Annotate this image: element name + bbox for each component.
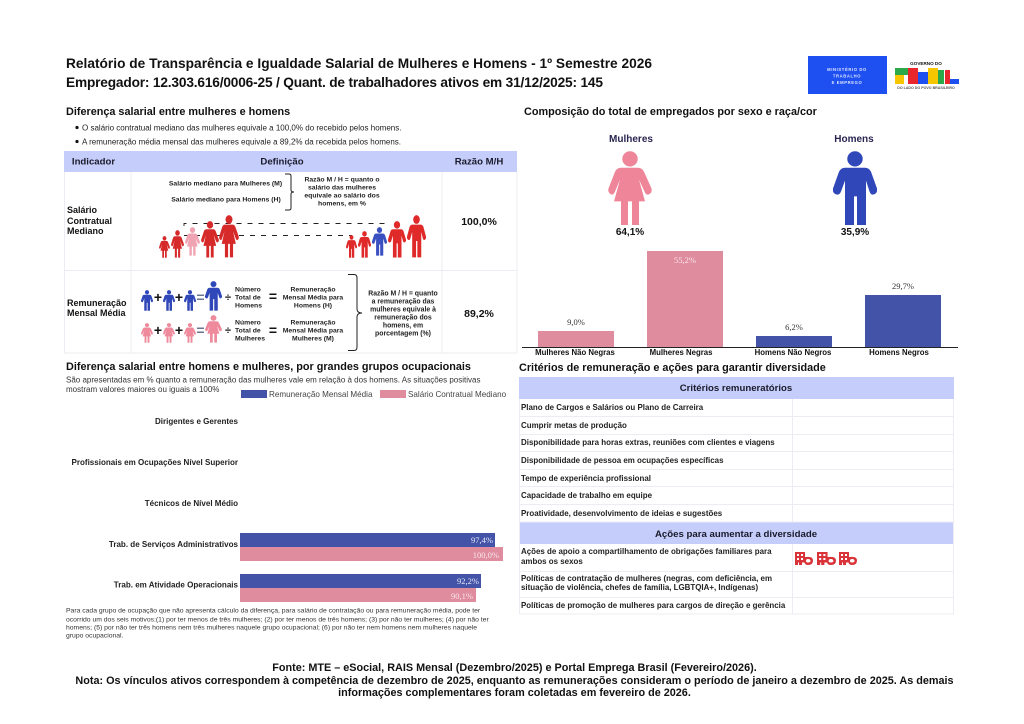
row label: Salário — [67, 205, 98, 215]
definition text: mulheres equivale à — [370, 306, 436, 314]
logo: Governo do Brasil — [895, 61, 959, 90]
title: Empregador: 12.303.616/0006-25 / Quant. de trabalhadores ativos em 31/12/2025: 145 — [66, 75, 603, 90]
definition text: Salário mediano para Homens (H) — [171, 196, 281, 204]
formula: homens — [141, 281, 343, 311]
icon group: homens — [833, 134, 877, 238]
definition text: remuneração dos — [374, 314, 432, 322]
icon group: homens: 35,9% — [841, 227, 869, 238]
dashed median lines — [184, 224, 387, 236]
formula: mulheres: = — [196, 322, 205, 338]
heading: critérios: Critérios de remuneração e ações para garantir diversidade — [519, 362, 826, 374]
rows: critérios: Tempo de experiência profissional — [521, 474, 651, 483]
formula: mulheres: Mensal Média para — [283, 328, 343, 334]
row: remuneração mensal média — [67, 274, 495, 350]
subtitle: São apresentadas em % quanto a remuneração das mulheres vale em relação à dos homens. As situações positivas — [66, 376, 480, 384]
row label: Remuneração — [67, 298, 127, 308]
bars: atividade operacional — [240, 574, 481, 602]
bar chart: composição: Homens Não Negros — [755, 348, 832, 357]
definition text: Salário mediano para Mulheres (M) — [169, 180, 282, 188]
formula: mulheres — [141, 315, 343, 343]
note: motivos: Para cada grupo de ocupação que não apresenta cálculo da diferença, para salário de contratação ou para remuneração média, pode ter — [66, 608, 481, 614]
category labels: Dirigentes e Gerentes — [155, 417, 239, 426]
formula: homens: Total de — [235, 294, 261, 302]
rows: critérios: Cumprir metas de produção — [521, 421, 627, 430]
definition text: Razão M / H = quanto o — [304, 176, 380, 184]
bar chart: composição: 29,7% — [892, 281, 914, 291]
rows: ações — [521, 547, 786, 610]
icon group: homens: Homens — [834, 134, 874, 145]
table: critérios — [519, 377, 954, 614]
bar chart: composição: Homens Negros — [869, 348, 930, 357]
icon group: mulheres — [608, 134, 653, 238]
logo: Ministério do Trabalho e Emprego — [808, 56, 887, 94]
bars: serviços administrativos: 97,4% — [471, 535, 493, 545]
heading: diferença por grupos: Diferença salarial entre homens e mulheres, por grandes grupos ocupacionais — [66, 361, 471, 373]
formula: homens: = — [196, 289, 205, 305]
bars: atividade operacional: 92,2% — [457, 576, 479, 586]
icons: empresas — [795, 552, 857, 565]
brace — [285, 174, 294, 210]
footer: fonte e nota: Fonte: MTE – eSocial, RAIS Mensal (Dezembro/2025) e Portal Emprega Brasil (Fevereiro/2026). — [272, 662, 757, 674]
legend: Salário Contratual Mediano — [408, 390, 507, 399]
formula: mulheres: Remuneração — [291, 320, 335, 326]
bullets: resumo — [75, 124, 401, 146]
definition text — [169, 176, 380, 208]
category labels — [72, 417, 239, 590]
bar chart: composição: 6,2% — [785, 322, 803, 332]
icon group: mulheres: 64,1% — [616, 227, 644, 238]
formula: homens: ÷ — [225, 292, 231, 304]
row: salário contratual mediano — [67, 174, 497, 258]
header: critérios remuneratórios: Critérios remuneratórios — [680, 383, 792, 394]
subtitle: mostram valores maiores ou iguais a 100% — [66, 385, 219, 394]
note: motivos: ocorrido um dos seis motivos:(1) por ter menos de três mulheres; (2) por ter menos de três homens; (3) por não ter mulheres; (4) por não ter — [66, 616, 489, 624]
formula: mulheres: + — [175, 322, 183, 338]
formula: mulheres: = — [269, 322, 277, 338]
footer: fonte e nota: Nota: Os vínculos ativos correspondem à competência de dezembro de 2025, enquanto as remunerações consideram o período de janeiro a dezembro de 2025. As demais — [75, 675, 954, 687]
icons: mulheres — [159, 215, 239, 258]
formula: mulheres: + — [154, 322, 162, 338]
bullets: resumo: O salário contratual mediano das mulheres equivale a 100,0% do recebido pelos homens. — [82, 124, 401, 132]
row label — [67, 205, 112, 236]
definition text: Razão M / H = quanto — [368, 290, 438, 298]
category labels: Técnicos de Nível Médio — [145, 499, 238, 508]
table header: Razão M/H — [455, 156, 503, 168]
logo: Ministério do Trabalho e Emprego: MINISTÉRIO DO — [827, 67, 867, 72]
definition text: homens, em % — [318, 200, 366, 208]
brace — [348, 274, 362, 350]
row label: Contratual — [67, 216, 112, 226]
bar chart: composição: 55,2% — [674, 255, 696, 265]
icons: homens — [346, 215, 426, 258]
table: indicadores — [64, 151, 517, 353]
rows: ações: Políticas de promoção de mulheres para cargos de direção e gerência — [521, 601, 786, 610]
note: motivos: homens; (5) por não ter três homens nem três mulheres naquele grupo ocupacional; (6) por não ter nem homens nem mulheres naquele — [66, 624, 477, 632]
category labels: Trab. de Serviços Administrativos — [109, 540, 239, 549]
definition text: porcentagem (%) — [375, 330, 431, 338]
value: 100,0% — [461, 216, 497, 228]
rows: critérios: Plano de Cargos e Salários ou Plano de Carreira — [521, 403, 704, 412]
rows: critérios: Disponibilidade de pessoa em ocupações específicas — [521, 456, 724, 465]
icon group: mulheres: Mulheres — [609, 134, 653, 145]
legend: Remuneração Mensal Média — [269, 390, 373, 399]
formula: homens: Remuneração — [291, 286, 335, 294]
bar chart: grupos ocupacionais — [72, 417, 503, 602]
category labels: Trab. em Atividade Operacionais — [114, 580, 239, 590]
rows: ações: Políticas de contratação de mulheres (negras, com deficiência, em — [521, 574, 772, 583]
formula: homens: Mensal Média para — [283, 294, 343, 302]
formula: homens: + — [175, 289, 183, 305]
rows: critérios: Disponibilidade para horas extras, reuniões com clientes e viagens — [521, 438, 775, 447]
formula: mulheres: Número — [235, 320, 261, 326]
definition text: salário das mulheres — [308, 184, 376, 192]
row label: Mensal Média — [67, 308, 127, 318]
rows: ações: Ações de apoio a compartilhamento de obrigações familiares para — [521, 547, 772, 556]
logo: Ministério do Trabalho e Emprego: TRABALHO — [833, 74, 861, 78]
formula: homens: + — [154, 289, 162, 305]
bullets: resumo: A remuneração média mensal das mulheres equivale a 89,2% da recebida pelos homens. — [82, 138, 401, 146]
logo: Governo do Brasil: DO LADO DO POVO BRASILEIRO — [897, 86, 955, 90]
bars: atividade operacional: 90,1% — [451, 591, 473, 601]
rows: ações: situação de violência, chefes de família, LGBTQIA+, Indígenas) — [521, 583, 758, 592]
formula: mulheres: Mulheres — [235, 336, 265, 342]
row label — [67, 298, 127, 318]
bar chart: composição: 9,0% — [567, 317, 585, 327]
footer: fonte e nota — [75, 662, 954, 699]
legend — [241, 390, 507, 399]
title — [66, 56, 652, 90]
rows: critérios — [521, 403, 775, 518]
bar chart: composição: Mulheres Negras — [650, 348, 713, 357]
bars: serviços administrativos: 100,0% — [473, 550, 499, 560]
table header: Definição — [260, 156, 304, 168]
formula: homens: = — [269, 288, 277, 304]
formula: mulheres: Mulheres (M) — [292, 336, 334, 342]
definition text — [368, 290, 438, 338]
logo: Ministério do Trabalho e Emprego: E EMPREGO — [832, 80, 863, 85]
definition text: homens, em — [383, 322, 423, 330]
note: motivos: grupo ocupacional. — [66, 632, 124, 640]
bars: serviços administrativos — [240, 533, 503, 561]
bar chart: composição — [522, 251, 958, 357]
subtitle — [66, 376, 480, 394]
category labels: Profissionais em Ocupações Nível Superior — [72, 458, 238, 467]
definition text: equivale ao salário dos — [304, 192, 380, 200]
row label: Mediano — [67, 226, 104, 236]
footer: fonte e nota: informações complementares foram coletadas em fevereiro de 2026. — [338, 687, 691, 699]
formula: homens: Homens (H) — [294, 302, 332, 310]
rows: ações: ambos os sexos — [521, 557, 583, 566]
title: Relatório de Transparência e Igualdade Salarial de Mulheres e Homens - 1º Semestre 2026 — [66, 56, 652, 71]
formula: homens: Número — [235, 286, 261, 294]
definition text: a remuneração das — [372, 298, 435, 306]
formula: homens: Homens — [235, 302, 262, 310]
heading: composição: Composição do total de empregados por sexo e raça/cor — [524, 106, 818, 118]
table header: Indicador — [72, 156, 115, 168]
value: 89,2% — [464, 308, 495, 320]
rows: critérios: Proatividade, desenvolvimento de ideias e sugestões — [521, 509, 723, 518]
bar chart: composição: Mulheres Não Negras — [535, 348, 616, 357]
logo: Governo do Brasil: GOVERNO DO — [910, 61, 942, 66]
formula: mulheres: Total de — [235, 328, 261, 334]
table header — [64, 151, 517, 172]
formula: mulheres: ÷ — [225, 325, 231, 337]
rows: critérios: Capacidade de trabalho em equipe — [521, 491, 653, 500]
header: ações: Ações para aumentar a diversidade — [655, 529, 818, 540]
heading: diferença salarial: Diferença salarial entre mulheres e homens — [66, 106, 290, 118]
note: motivos — [66, 608, 489, 640]
